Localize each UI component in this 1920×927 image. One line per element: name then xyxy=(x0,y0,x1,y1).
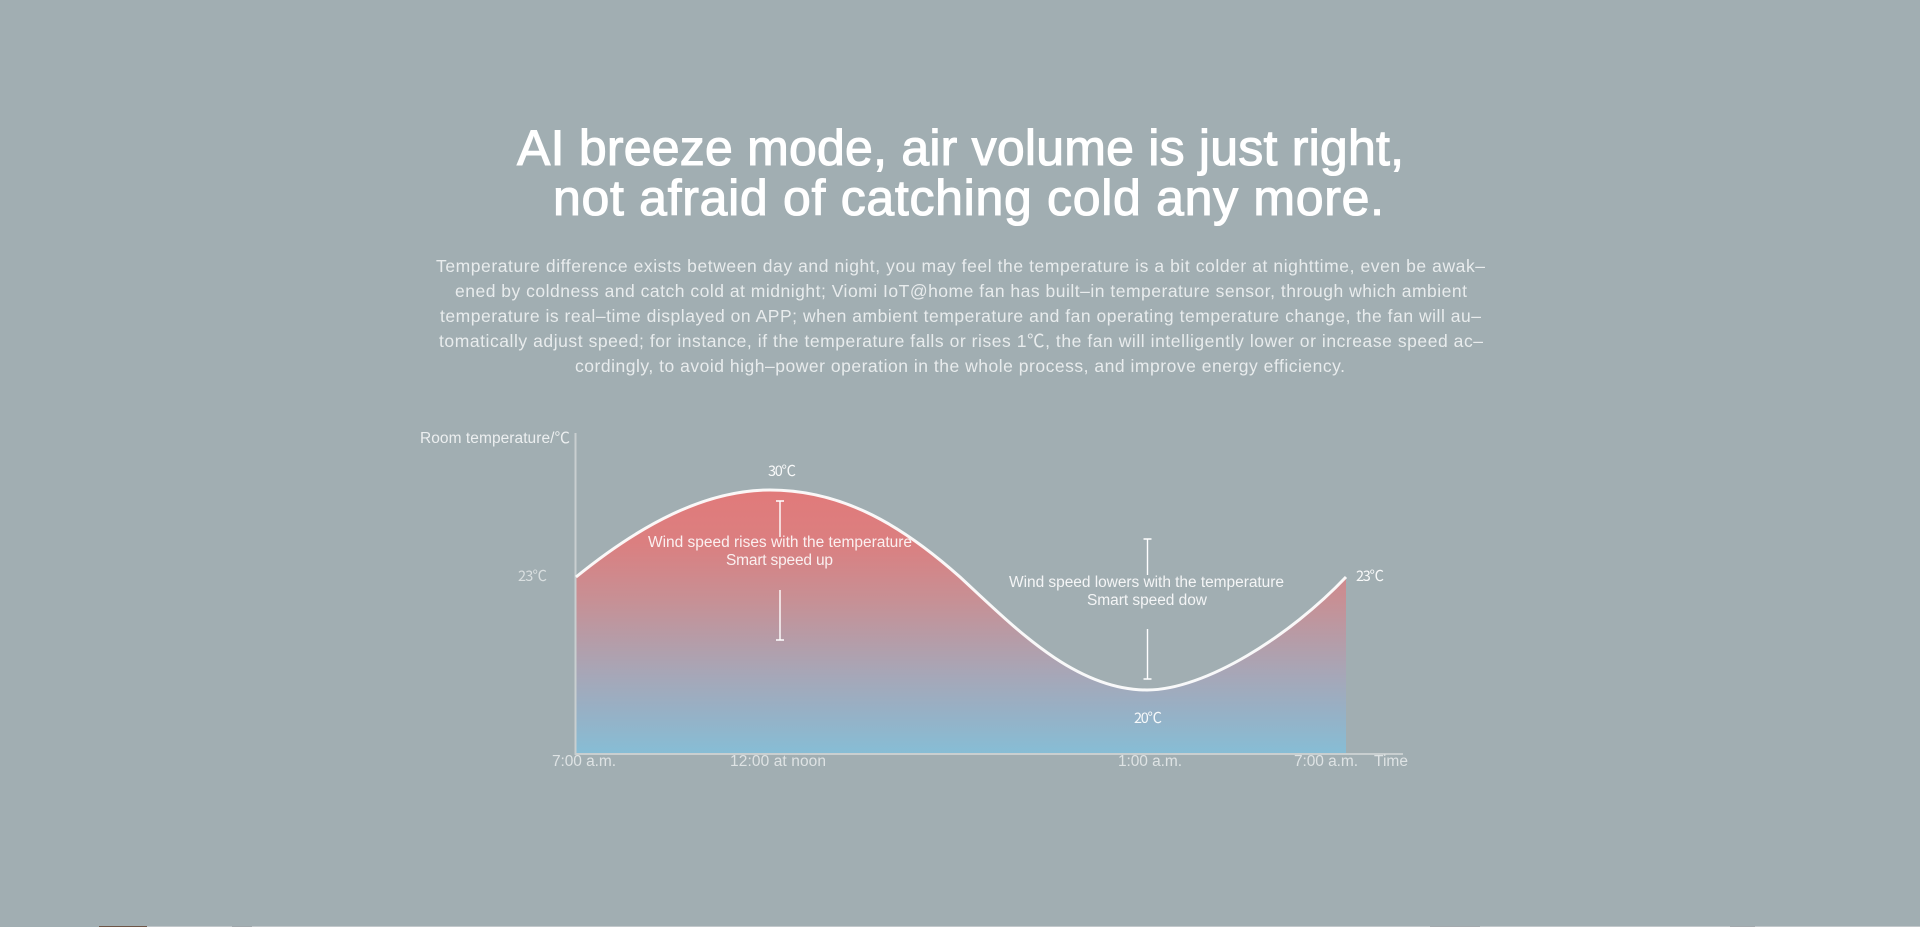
x axis labels xyxy=(552,753,1408,770)
callout: wind speed down xyxy=(1009,539,1284,679)
callout: wind speed down: Smart speed dow xyxy=(1087,592,1208,609)
description text: tomatically adjust speed; for instance, if the temperature falls or rises 1℃, the fan will intelligently lower or increase speed ac– xyxy=(439,331,1483,351)
x axis labels: Time xyxy=(1374,753,1408,770)
x axis labels: 7:00 a.m. xyxy=(552,753,616,770)
description text: temperature is real–time displayed on APP; when ambient temperature and fan operating temperature change, the fan will au– xyxy=(440,306,1481,326)
callout: wind speed up xyxy=(648,501,912,640)
temperature curve xyxy=(576,490,1346,690)
description text: cordingly, to avoid high–power operation in the whole process, and improve energy efficiency. xyxy=(575,356,1345,376)
callout: wind speed up: Smart speed up xyxy=(726,552,833,569)
start temperature label: 23℃ xyxy=(518,565,547,586)
callout: wind speed up: Wind speed rises with the temperature xyxy=(648,534,912,551)
trough label: 20℃ xyxy=(1134,707,1162,728)
title xyxy=(517,120,1404,226)
area under curve xyxy=(576,490,1346,753)
x axis labels: 7:00 a.m. xyxy=(1294,753,1358,770)
peak label: 30℃ xyxy=(768,460,796,481)
bottom edge strip xyxy=(0,926,1920,927)
temperature chart xyxy=(420,430,1408,770)
callout: wind speed down: Wind speed lowers with the temperature xyxy=(1009,574,1284,591)
description text xyxy=(436,256,1485,376)
axes xyxy=(576,433,1403,754)
description text: Temperature difference exists between day and night, you may feel the temperature is a bit colder at nighttime, even be awak– xyxy=(436,256,1485,276)
y axis label: Room temperature/℃ xyxy=(420,430,570,447)
description text: ened by coldness and catch cold at midnight; Viomi IoT@home fan has built–in temperature sensor, through which ambient xyxy=(455,281,1467,301)
title: not afraid of catching cold any more. xyxy=(553,170,1384,226)
end temperature label: 23℃ xyxy=(1356,565,1384,586)
x axis labels: 12:00 at noon xyxy=(730,753,826,770)
title: AI breeze mode, air volume is just right, xyxy=(517,120,1404,176)
x axis labels: 1:00 a.m. xyxy=(1118,753,1182,770)
